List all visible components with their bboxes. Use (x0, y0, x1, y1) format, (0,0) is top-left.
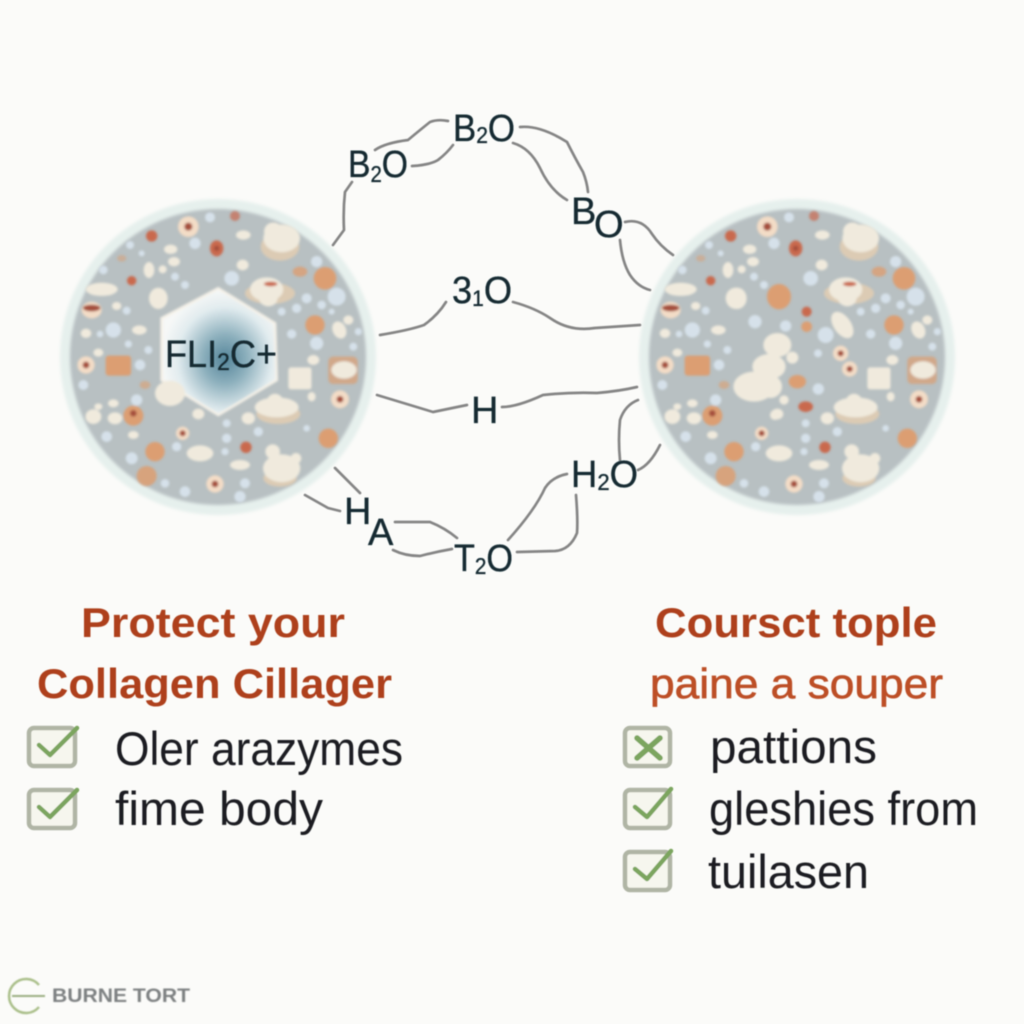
heading: Collagen Cillager: Collagen Cillager (37, 660, 392, 707)
checkbox item: pattions (625, 720, 877, 773)
label: T2O: 2 (475, 553, 486, 579)
icon: logo ring (9, 979, 45, 1013)
heading: Coursct tople: Coursct tople (655, 599, 937, 646)
checkbox item: Oler arazymes: Oler arazymes (115, 722, 403, 775)
label: top B2O: O (488, 108, 515, 150)
label: T2O: O (486, 538, 513, 580)
checkbox item: gleshies from: gleshies from (709, 782, 978, 835)
label: top B2O: B (453, 108, 478, 150)
label: H2O: 2 (597, 469, 610, 495)
label: left B2O: 2 (370, 161, 382, 187)
label: FLI2C+: FLI (165, 334, 220, 376)
panel: left circle (60, 199, 376, 515)
panel: right text column (625, 599, 978, 898)
checkbox item: tuilasen (625, 845, 869, 898)
label: 31O: 3 (452, 270, 473, 312)
label: BO: B (571, 191, 596, 233)
molecule labels (344, 108, 638, 580)
label: HA: H (344, 491, 371, 533)
checkbox item: tuilasen: tuilasen (708, 845, 869, 898)
label: left B2O: O (382, 144, 408, 186)
heading: paine a souper: paine a souper (650, 660, 943, 707)
hexagon core (162, 288, 277, 415)
heading: Protect your: Protect your (81, 599, 345, 646)
label: BO: O (594, 204, 624, 246)
label: T2O: T (454, 538, 477, 580)
label: FLI2C+: C+ (230, 334, 277, 376)
label: top B2O: 2 (476, 122, 488, 148)
checkbox item: fime body (29, 782, 323, 835)
label: H: H (471, 390, 498, 432)
connecting bonds (305, 120, 673, 556)
checkbox item: fime body: fime body (115, 782, 323, 835)
label: FLI2C+: 2 (217, 349, 230, 376)
label: H2O: H (571, 454, 598, 496)
label: left B2O: B (348, 144, 373, 186)
label: 31O: O (484, 270, 512, 312)
checkbox item: pattions: pattions (710, 720, 877, 773)
panel: left text column (29, 599, 403, 835)
text: BURNE TORT: BURNE TORT (52, 986, 190, 1007)
logo: Burne Tort (9, 979, 190, 1013)
panel: right circle (639, 199, 955, 515)
label: H2O: O (610, 454, 638, 496)
label: 31O: 1 (472, 286, 484, 311)
label: HA: A (368, 512, 394, 554)
